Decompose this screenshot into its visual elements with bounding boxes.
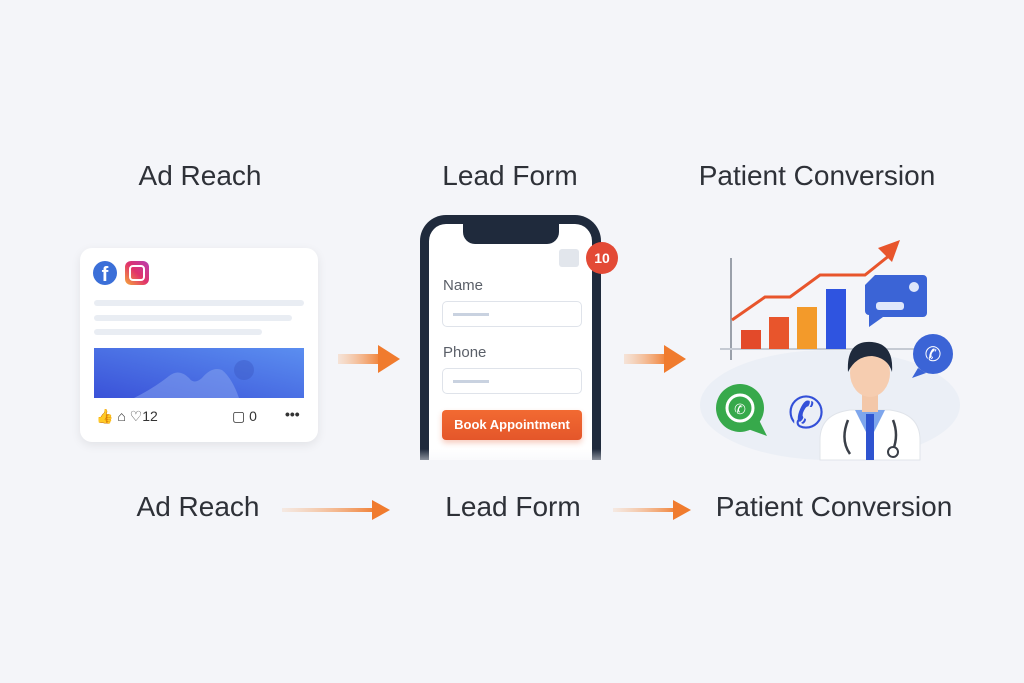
panel: social ad card: ••• [285, 406, 300, 422]
icon: facebook [93, 261, 117, 285]
title: Ad Reach: Ad Reach [139, 160, 261, 191]
text placeholder lines [94, 300, 304, 306]
label: phone: Phone [443, 344, 486, 361]
icon: whatsapp [716, 384, 767, 436]
arrow: bottom 2 [613, 500, 691, 520]
icon: instagram [125, 261, 149, 285]
arrow: phone to conversion [624, 345, 686, 373]
notch [463, 222, 559, 244]
arrow: bottom 1 [282, 500, 390, 520]
input: name [442, 301, 582, 327]
badge [559, 249, 579, 267]
title: Patient Conversion: Patient Conversion [699, 160, 935, 191]
panel: patient conversion illustration [700, 240, 960, 460]
icon: facebook: f [102, 264, 108, 286]
bottom label: Ad Reach: Ad Reach [137, 491, 259, 522]
icon: phone bubble [912, 334, 953, 378]
panel: social ad card [80, 248, 318, 442]
doctor [820, 342, 920, 460]
button: Book Appointment: Book Appointment [454, 417, 570, 432]
bottom label: Patient Conversion: Patient Conversion [716, 491, 952, 522]
panel: social ad card: ▢ 0 [232, 408, 257, 424]
chart [720, 240, 920, 360]
icon: whatsapp: ✆ [734, 401, 746, 417]
icon: phone bubble: ✆ [925, 344, 941, 366]
icon: chat bubble [865, 275, 927, 327]
arrow: card to phone [338, 345, 400, 373]
button: Book Appointment [442, 410, 582, 440]
text: 10 [594, 250, 610, 266]
ad image [94, 348, 304, 398]
panel: phone lead form [420, 215, 601, 460]
title: Lead Form: Lead Form [442, 160, 578, 191]
reactions row: 👍 ⌂ ♡12 [96, 408, 158, 424]
label: name: Name [443, 277, 483, 294]
icon: phone handset: ✆ [788, 389, 824, 438]
bottom label: Lead Form: Lead Form [445, 491, 581, 522]
input: phone [442, 368, 582, 394]
